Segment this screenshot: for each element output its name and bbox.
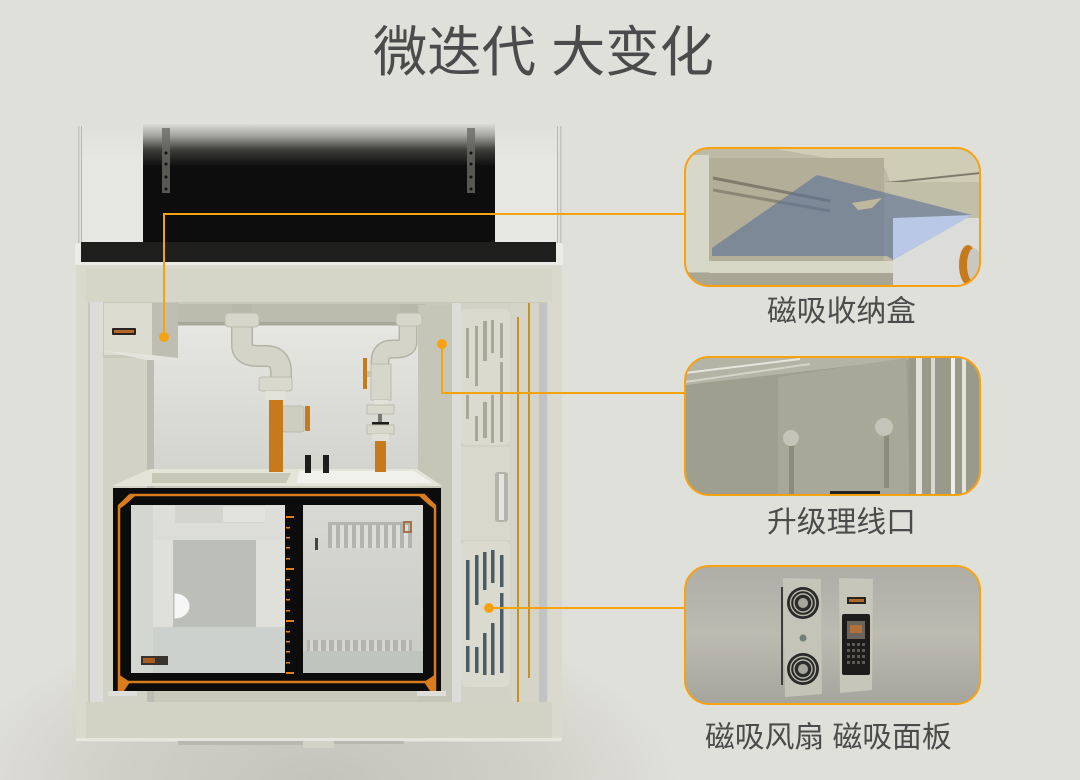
label: magnetic fan and magnetic panel: 磁吸风扇 磁吸面板 — [705, 721, 952, 754]
left chamber window — [131, 505, 285, 673]
right chamber window — [303, 505, 423, 673]
label: magnetic storage box: 磁吸收纳盒 — [767, 295, 916, 328]
title: 微迭代 大变化 — [373, 22, 714, 83]
magnetic storage box — [104, 303, 178, 360]
water level scale — [286, 516, 294, 674]
connector: storage box callout — [159, 214, 685, 342]
icon: fan plate — [781, 578, 822, 697]
panel: magnetic fan and control panel — [685, 566, 980, 704]
panel: upgraded cable port — [685, 357, 980, 495]
label: upgraded cable port: 升级理线口 — [767, 506, 916, 539]
cabinet frame — [76, 265, 562, 748]
left drain pipe — [225, 304, 310, 472]
connector: cable port callout — [437, 339, 685, 393]
icon: control plate — [839, 578, 873, 693]
connector: fan and panel callout — [484, 603, 685, 613]
glass tank above cabinet — [75, 124, 563, 265]
sump tank body — [108, 488, 446, 696]
right inlet pipe — [363, 304, 422, 472]
aquarium cabinet illustration — [75, 124, 563, 748]
sump tank top tray — [112, 455, 442, 486]
panel: magnetic storage box — [685, 148, 981, 286]
sliding side panel with slots — [461, 309, 510, 687]
